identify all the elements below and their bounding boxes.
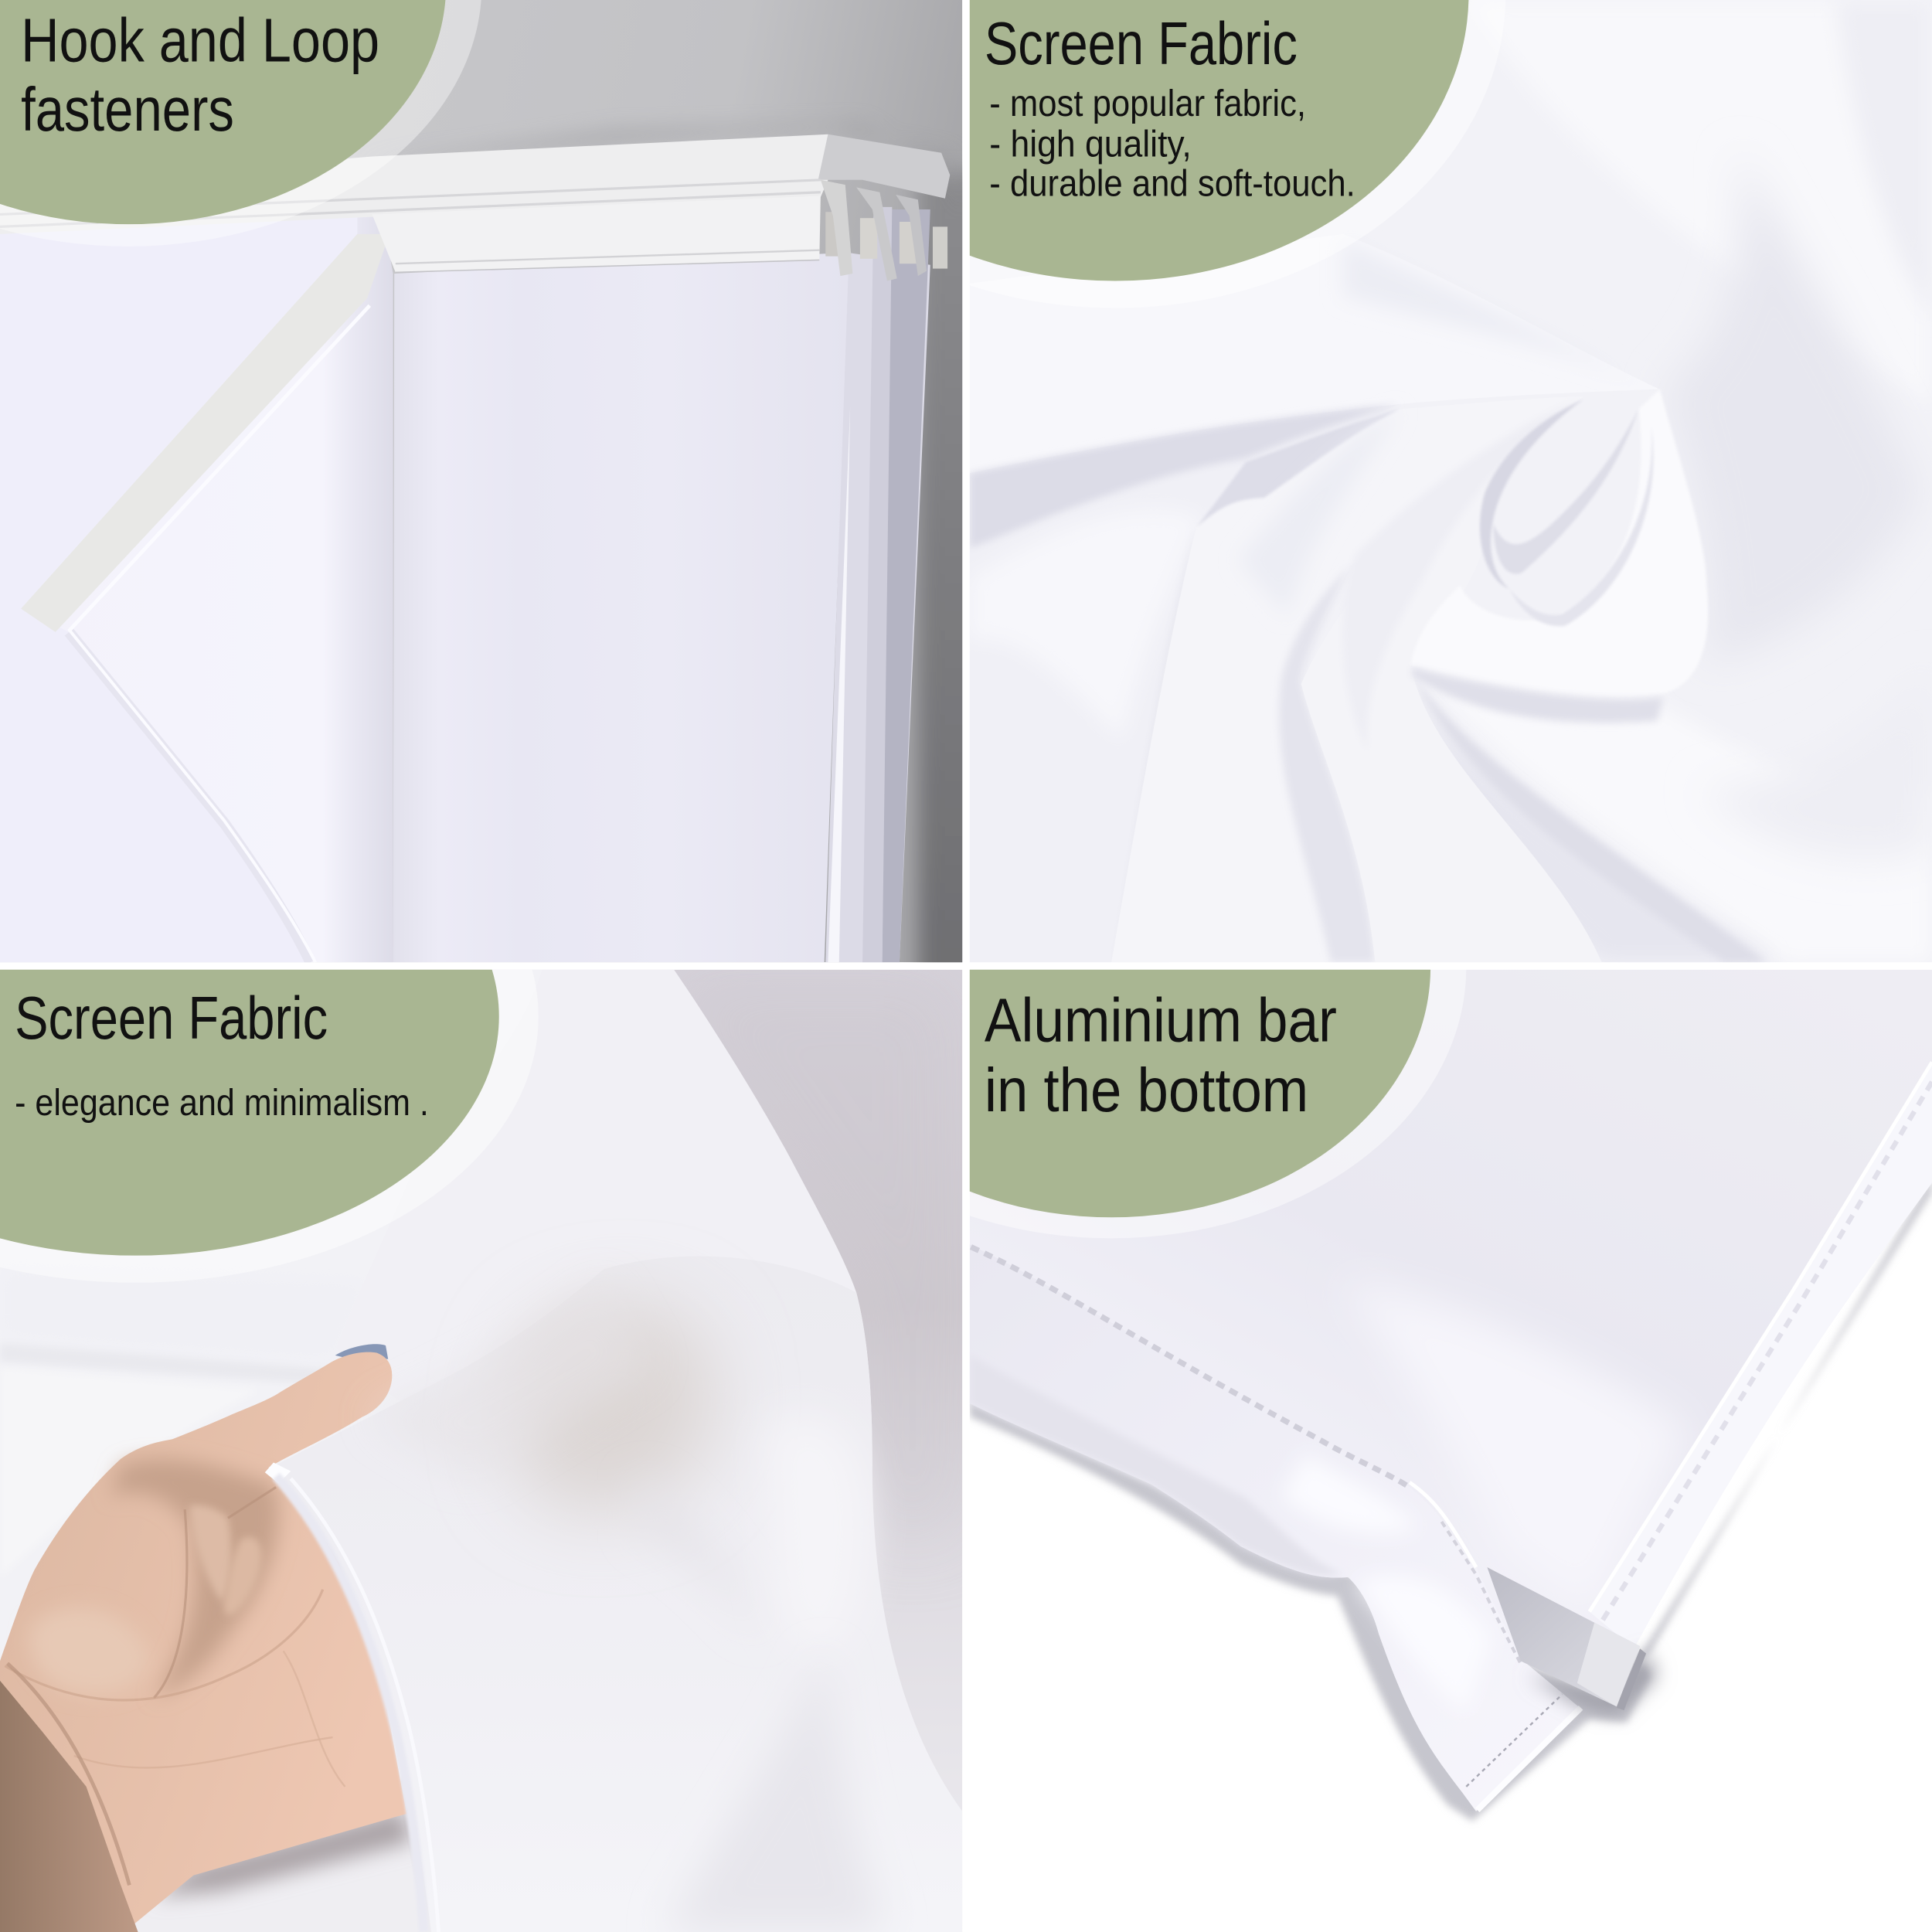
heading: screen fabric: Screen Fabric xyxy=(15,984,328,1052)
feature list: - durable and soft-touch. xyxy=(989,164,1355,205)
blind fabric xyxy=(970,970,1932,1811)
hem edge xyxy=(1478,1708,1581,1810)
heading: hook and loop fasteners: Hook and Loop xyxy=(21,6,379,75)
feature text: - elegance and minimalism . xyxy=(15,1083,429,1124)
swirl pocket xyxy=(1411,389,1708,723)
panel: screen fabric held in hand xyxy=(0,970,962,1932)
left surface xyxy=(0,970,566,1932)
feature list: - high quality, xyxy=(989,124,1192,165)
left lower cloth xyxy=(970,404,1400,962)
heading: aluminium bar in the bottom: in the bottom xyxy=(985,1056,1308,1124)
panel: aluminium bar in the bottom xyxy=(970,970,1932,1932)
fingernail xyxy=(335,1344,388,1359)
aluminium bar xyxy=(1487,1567,1657,1715)
heading: screen fabric: Screen Fabric xyxy=(985,9,1298,77)
hand xyxy=(0,1344,406,1932)
bottom surface shadow xyxy=(124,1814,425,1932)
top-left fold highlight xyxy=(970,234,1660,473)
feature list: - most popular fabric, xyxy=(989,83,1306,124)
panel: screen fabric swirl xyxy=(970,0,1932,962)
central ridge xyxy=(1116,569,1189,962)
callout: hook and loop xyxy=(0,0,481,247)
front slat fabric xyxy=(393,253,849,962)
callout: screen fabric elegance xyxy=(0,750,539,1283)
rail xyxy=(0,134,950,272)
hanging slats behind the front slat xyxy=(825,207,930,962)
panel: hook and loop fasteners xyxy=(0,0,992,986)
palm hollow xyxy=(111,1460,278,1698)
heading: aluminium bar in the bottom: Aluminium bar xyxy=(985,985,1337,1054)
callout: aluminium bar xyxy=(757,696,1466,1238)
bright lower area xyxy=(1343,1281,1688,1614)
callout: screen fabric features xyxy=(725,0,1505,308)
cast shadow xyxy=(970,1177,1932,1821)
heading: hook and loop fasteners: fasteners xyxy=(21,75,234,144)
hook and loop tape strip xyxy=(21,234,389,632)
right of ridge xyxy=(1301,683,1599,957)
carrier clips xyxy=(821,180,947,281)
seam line xyxy=(971,1247,1410,1487)
lifted slat corner xyxy=(0,212,393,962)
back fabric layer xyxy=(336,970,872,1466)
right side hem band xyxy=(1590,1062,1932,1648)
upper right soft folds xyxy=(1423,250,1901,963)
sheer fabric front layer xyxy=(269,1257,962,1932)
hem tube xyxy=(970,1244,1578,1811)
